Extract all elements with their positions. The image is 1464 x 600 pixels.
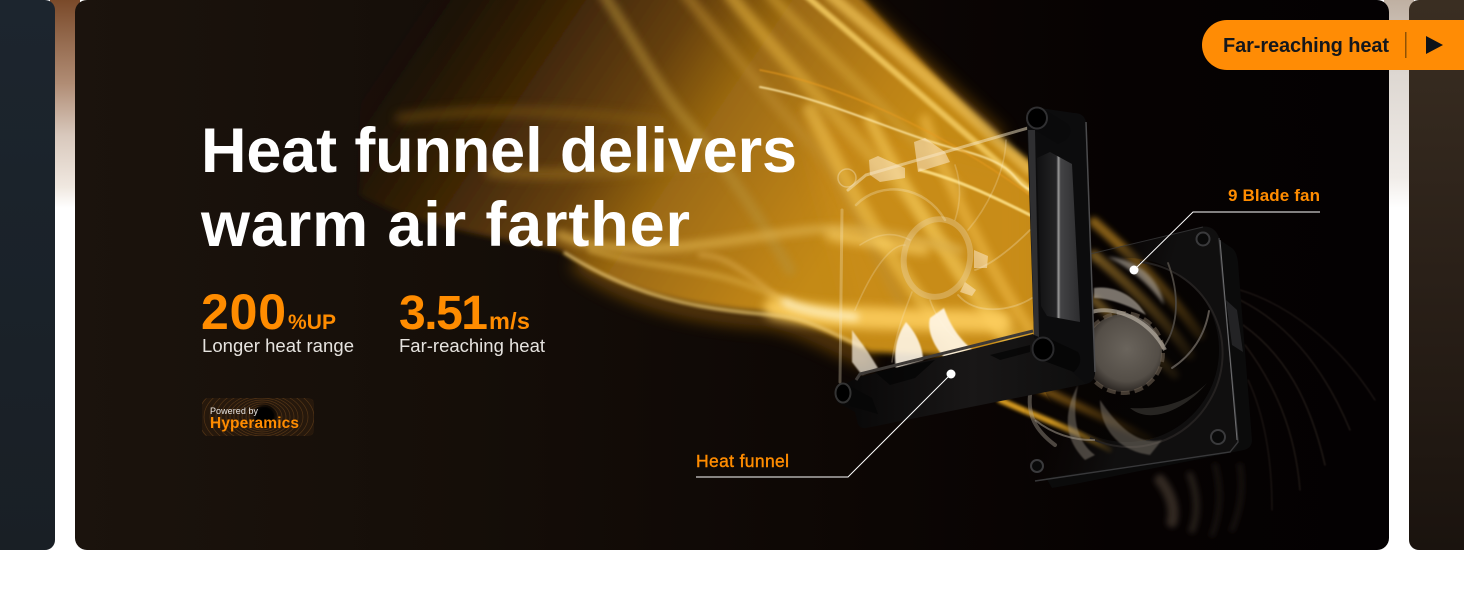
side bar [1027,108,1095,384]
bottom bar [837,334,1095,428]
stat: 3.51 m/s [399,287,545,356]
ghost see-through frame [838,128,1032,382]
halo around stream edges [575,262,870,360]
callout: 9 Blade fan [1130,186,1320,274]
bottom bar facets [875,345,1030,385]
stat: 200% up: 200 [201,284,286,340]
pipe stubs [836,108,1080,414]
fan rear plate [1046,240,1252,488]
stat: 200% up: %UP [288,311,336,334]
title: Heat funnel delivers [201,116,797,186]
heat stream light trails [360,0,1375,535]
icon: heat funnel [836,108,1095,428]
stat: 200% up [201,284,354,356]
icon: 9 blade fan [1024,227,1252,488]
fan opening tint [1035,258,1219,442]
stream body [360,0,1050,360]
central glow [832,131,844,147]
fan frame [1024,227,1238,481]
button: Far-reaching heat: Far-reaching heat [1223,35,1389,57]
horizontal ribbons [400,112,660,122]
badge: Powered by Hyperamics: Powered by [210,406,258,416]
badge: Powered by Hyperamics: Hyperamics [210,415,299,432]
streaks past the funnel [1094,222,1200,335]
panel: right neighbouring card [1409,0,1464,550]
callout: 9 Blade fan: 9 Blade fan [1228,186,1320,205]
stat: 200% up: Longer heat range [202,335,354,356]
title [200,116,797,260]
icon: play arrow [1426,36,1443,54]
stat: 3.51 m/s: Far-reaching heat [399,335,545,356]
button: Far-reaching heat [1202,20,1464,70]
stat: 3.51 m/s: m/s [489,308,530,334]
title: warm air farther [200,190,690,260]
stat: 3.51 m/s: 3.51 [399,287,488,340]
callout: Heat funnel: Heat funnel [696,451,789,471]
background gap left [50,0,80,208]
side bar insert [1037,152,1080,322]
callout: Heat funnel [696,370,956,477]
lower bright edge [775,308,1000,322]
ghost white blades [929,308,972,358]
badge: Powered by Hyperamics [202,398,314,436]
diagonal ribbons [604,0,790,270]
fan blades [1030,257,1209,460]
background gap right [1384,0,1414,208]
fan hub [1084,314,1162,392]
thin bright arcs [760,87,1030,190]
ghost frame tabs [869,138,988,296]
airflow wisps [1240,290,1375,510]
corner mounts [1031,232,1225,472]
panel: left neighbouring card [0,0,55,550]
